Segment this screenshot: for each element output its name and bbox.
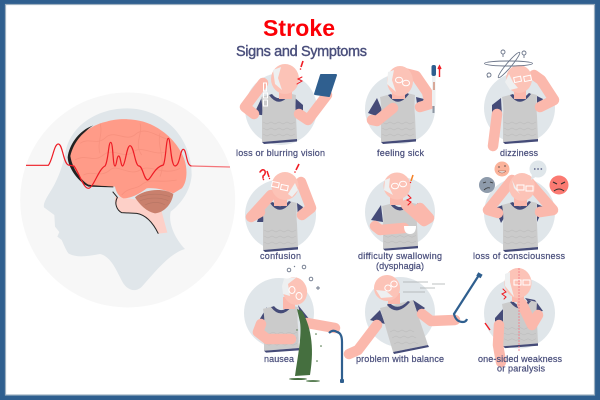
icon: exclamation xyxy=(297,61,303,84)
panel: feeling sick xyxy=(365,65,441,144)
icon: dashed midline xyxy=(518,268,520,351)
icon: tablet xyxy=(315,75,336,96)
cerebrum xyxy=(70,119,186,198)
panel: dizziness xyxy=(484,50,555,146)
icon: cane in air xyxy=(454,275,479,322)
label: loss of consciousness xyxy=(473,251,566,261)
brain stem xyxy=(115,197,167,234)
panel: loss or blurring vision xyxy=(245,61,336,145)
icon: dizzy rings xyxy=(484,50,532,79)
head silhouette and brain xyxy=(26,108,230,290)
label: feeling sick xyxy=(377,148,424,158)
icon: question and exclamation marks xyxy=(260,164,299,180)
label: loss or blurring vision xyxy=(236,148,325,158)
icon: dizzy swirls xyxy=(287,265,320,290)
panel: loss of consciousness xyxy=(479,160,568,252)
icon: grey face xyxy=(479,177,495,193)
icon: walking cane xyxy=(329,331,342,381)
label: dizziness xyxy=(500,148,538,158)
icon: vomit xyxy=(289,309,322,382)
icon: red face xyxy=(550,176,568,194)
label: (dysphagia) xyxy=(376,261,424,271)
icon: red marks xyxy=(407,175,413,205)
panel: brain illustration xyxy=(20,92,235,308)
icon: orange face xyxy=(494,162,510,176)
label: or paralysis xyxy=(497,364,546,374)
label: confusion xyxy=(260,251,301,261)
brain wave line xyxy=(26,138,192,188)
label: difficulty swallowing xyxy=(358,251,442,261)
brain shadow xyxy=(68,125,113,187)
label: one-sided weakness xyxy=(478,354,562,364)
panel: confusion xyxy=(245,164,316,252)
panel: difficulty swallowing xyxy=(365,172,435,251)
cerebellum xyxy=(135,190,173,213)
icon: thermometer xyxy=(432,65,441,113)
icon: red marks xyxy=(485,289,506,330)
icon: speech bubble xyxy=(530,160,546,180)
subtitle: Signs and Symptoms xyxy=(236,44,367,60)
panel: one-sided weakness xyxy=(484,268,555,362)
icon: cup xyxy=(404,226,416,234)
label: problem with balance xyxy=(356,354,444,364)
panel: nausea xyxy=(244,265,344,383)
title: Stroke xyxy=(263,15,335,41)
background circle xyxy=(20,92,235,308)
panel: problem with balance xyxy=(349,271,483,354)
icon: motion lines xyxy=(403,282,445,292)
brain folds xyxy=(75,123,180,195)
label: nausea xyxy=(264,354,294,364)
